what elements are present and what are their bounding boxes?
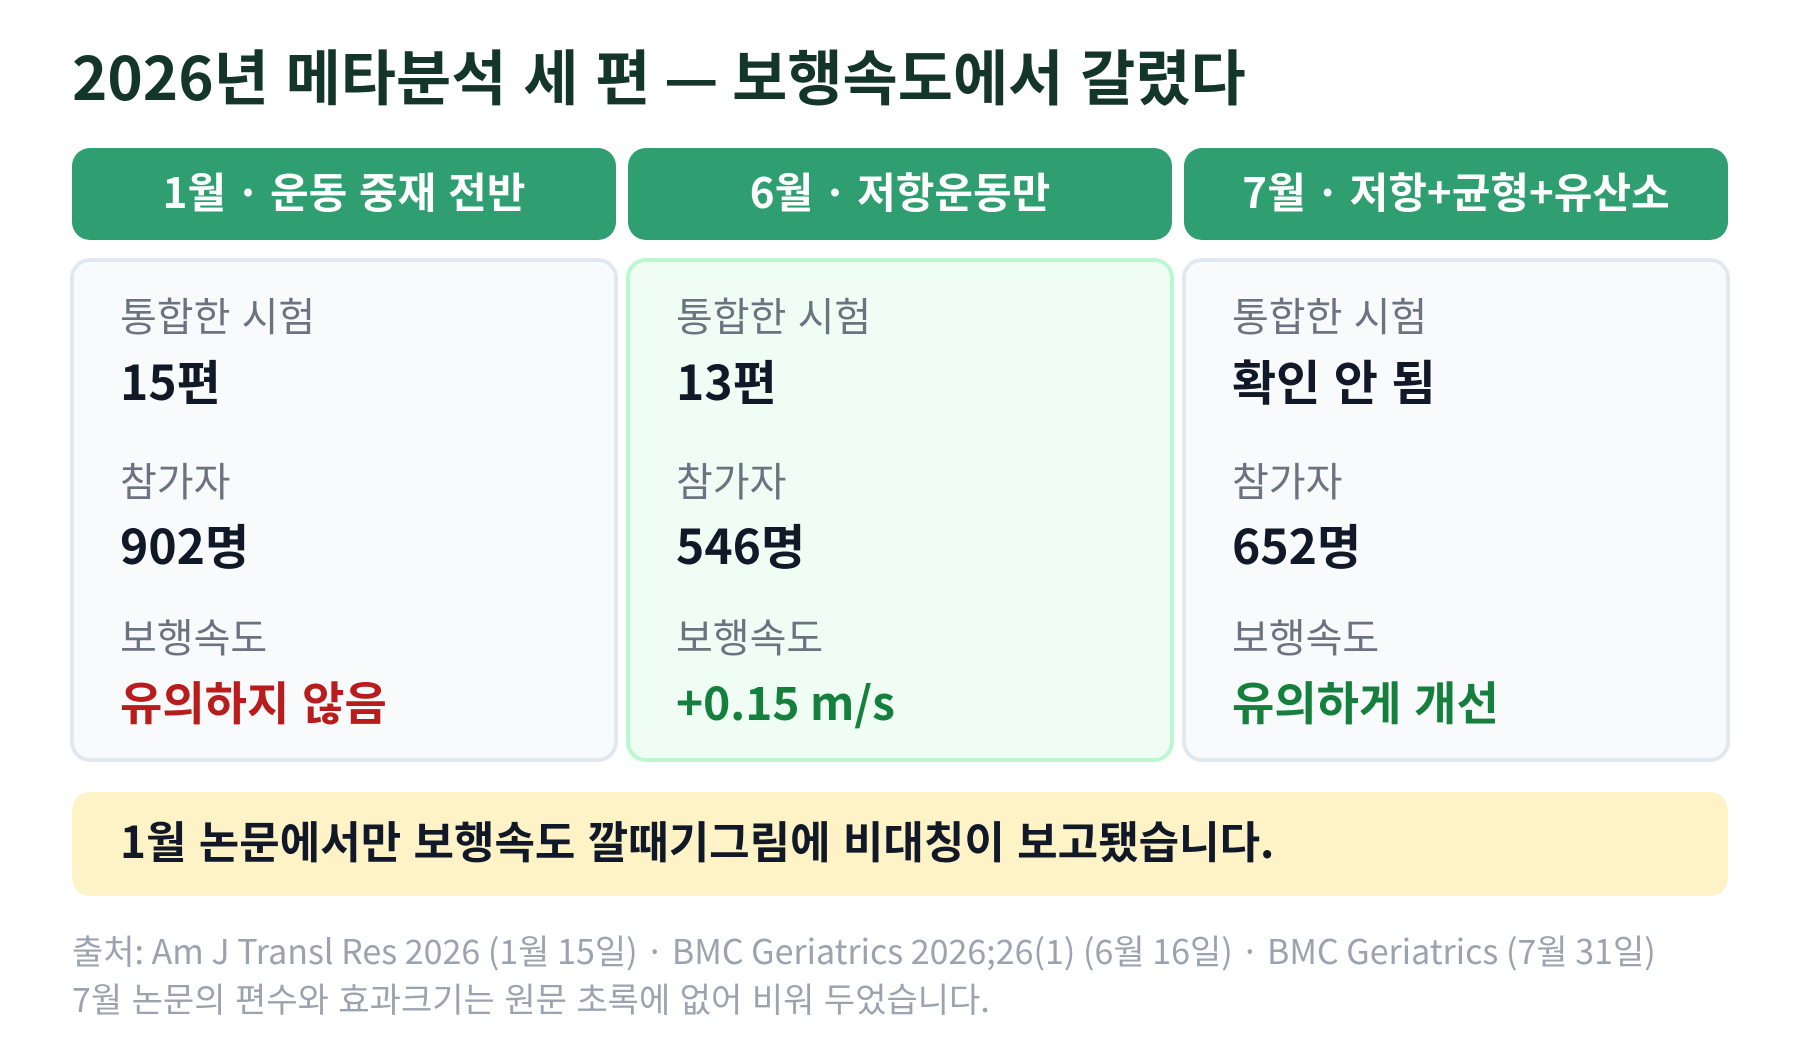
July gait speed: [1232, 606, 1499, 734]
panel: July meta-analysis: [1182, 258, 1730, 762]
January gait speed: 유의하지 않음: [120, 668, 387, 734]
January participants: [120, 450, 249, 578]
panel: January meta-analysis: [70, 258, 618, 762]
June gait speed: 보행속도: [676, 606, 823, 664]
January trials: [120, 285, 315, 414]
July trials: [1232, 285, 1436, 414]
June trials: 통합한 시험: [676, 285, 871, 343]
July participants: 참가자: [1232, 450, 1342, 508]
July participants: 652명: [1232, 508, 1361, 578]
January trials: 통합한 시험: [120, 285, 315, 343]
source notes: 출처: Am J Transl Res 2026 (1월 15일) · BMC Geriatrics 2026;26(1) (6월 16일) · BMC Geriatrics (7월 31일): [72, 925, 1656, 974]
June gait speed: +0.15 m/s: [676, 668, 895, 734]
column header: June: 6월 · 저항운동만: [750, 160, 1050, 221]
July trials: 확인 안 됨: [1232, 344, 1436, 414]
column header: July: [1184, 148, 1728, 240]
column header: June: [628, 148, 1172, 240]
source notes: 7월 논문의 편수와 효과크기는 원문 초록에 없어 비워 두었습니다.: [72, 973, 990, 1022]
January gait speed: 보행속도: [120, 606, 267, 664]
June gait speed: [676, 606, 895, 734]
column header: January: [72, 148, 616, 240]
panel: June meta-analysis: [626, 258, 1174, 762]
June participants: [676, 450, 805, 578]
source notes: [72, 925, 1656, 1022]
July gait speed: 유의하게 개선: [1232, 668, 1499, 734]
title: 2026년 메타분석 세 편 — 보행속도에서 갈렸다: [72, 31, 1246, 118]
January gait speed: [120, 606, 387, 734]
July participants: [1232, 450, 1361, 578]
January participants: 902명: [120, 508, 249, 578]
July gait speed: 보행속도: [1232, 606, 1379, 664]
column header: January: 1월 · 운동 중재 전반: [163, 160, 525, 221]
June participants: 참가자: [676, 450, 786, 508]
June trials: [676, 285, 871, 414]
column header: July: 7월 · 저항+균형+유산소: [1242, 160, 1670, 221]
callout: funnel plot asymmetry: [72, 792, 1728, 896]
January trials: 15편: [120, 344, 221, 414]
June participants: 546명: [676, 508, 805, 578]
callout: funnel plot asymmetry: 1월 논문에서만 보행속도 깔때기그림에 비대칭이 보고됐습니다.: [120, 807, 1274, 871]
January participants: 참가자: [120, 450, 230, 508]
June trials: 13편: [676, 344, 777, 414]
July trials: 통합한 시험: [1232, 285, 1427, 343]
